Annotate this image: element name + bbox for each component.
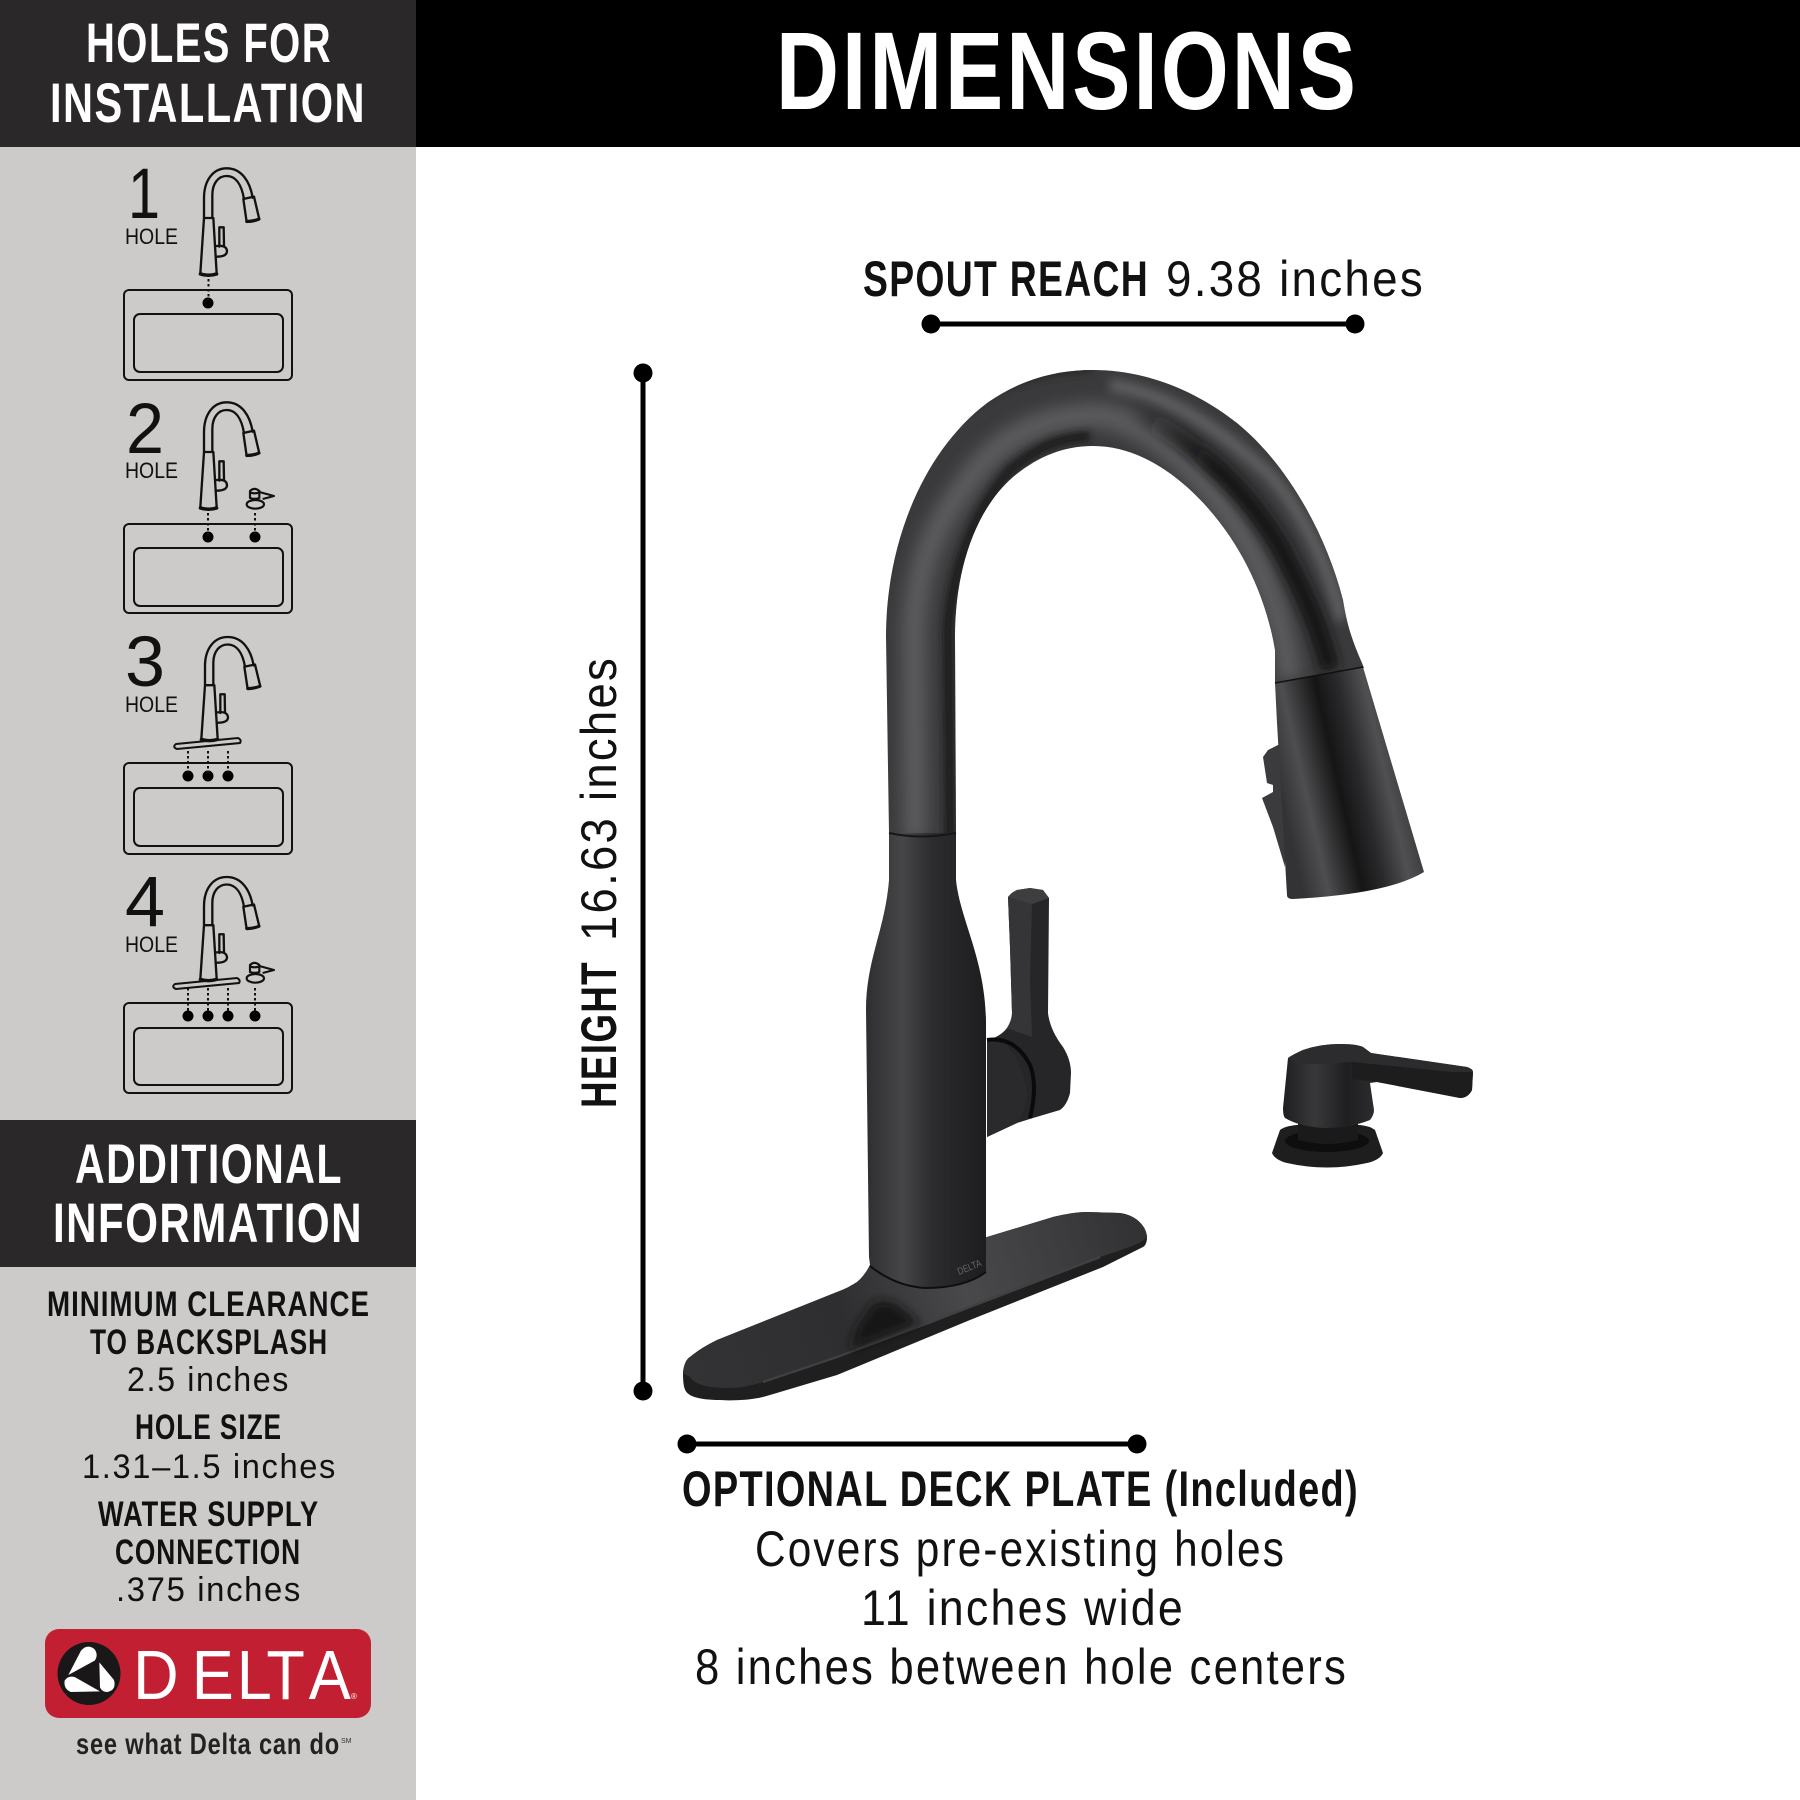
icon: 1 hole installation: 1 [128, 155, 160, 234]
heading: additional information: INFORMATION [53, 1191, 363, 1254]
text block: optional deck plate: Covers pre-existing holes [755, 1521, 1286, 1577]
text block: optional deck plate [682, 1461, 1359, 1695]
dimension: height [571, 364, 652, 1400]
icon: 2 hole installation: HOLE [125, 458, 178, 483]
logo: delta: ® [351, 1692, 357, 1701]
text block: optional deck plate: 11 inches wide [861, 1580, 1185, 1636]
heading: additional information: ADDITIONAL [75, 1132, 343, 1195]
icon: 3 hole installation [124, 623, 292, 854]
tagline: see what Delta can do [76, 1728, 340, 1761]
title: DIMENSIONS [776, 10, 1359, 133]
text block: minimum clearance: TO BACKSPLASH [90, 1323, 328, 1362]
icon: 2 hole installation [124, 390, 292, 613]
icon: 2 hole installation: 2 [126, 390, 164, 469]
text block: hole size: 1.31–1.5 inches [82, 1448, 337, 1486]
base ring [870, 1266, 986, 1288]
dimension line: deck plate width [678, 1434, 1146, 1454]
icon: 4 hole installation: HOLE [125, 932, 178, 957]
icon: 1 hole installation [124, 155, 292, 380]
text block: hole size [82, 1408, 337, 1486]
spout arch [870, 360, 1380, 840]
panel: left sidebar [0, 0, 416, 1800]
heading: holes for installation: INSTALLATION [50, 71, 366, 134]
icon: 4 hole installation: 4 [125, 863, 165, 942]
dimension: height: 16.63 inches [571, 656, 627, 941]
heading: holes for installation: HOLES FOR [86, 11, 332, 74]
heading: holes for installation [0, 0, 416, 147]
spray head [1262, 667, 1424, 899]
dimension: spout reach [863, 251, 1425, 334]
text block: water supply connection: WATER SUPPLY [98, 1495, 319, 1534]
text block: minimum clearance [47, 1285, 370, 1399]
deck plate [683, 1212, 1147, 1400]
dimension: spout reach: SPOUT REACH [863, 251, 1149, 307]
text block: minimum clearance: 2.5 inches [127, 1361, 290, 1399]
soap dispenser [1272, 1044, 1473, 1168]
faucet body [866, 830, 986, 1288]
text block: optional deck plate: OPTIONAL DECK PLATE (Included) [682, 1461, 1359, 1517]
text block: water supply connection: .375 inches [116, 1571, 302, 1609]
illustration: black kitchen faucet [683, 360, 1473, 1400]
heading: additional information [0, 1120, 416, 1267]
tagline: SM [341, 1738, 352, 1745]
icon: 3 hole installation: 3 [125, 623, 165, 702]
text block: hole size: HOLE SIZE [135, 1408, 282, 1447]
title bar: dimensions [416, 0, 1800, 147]
icon: 4 hole installation [124, 863, 292, 1093]
icon: 3 hole installation: HOLE [125, 692, 178, 717]
icon: 1 hole installation: HOLE [125, 224, 178, 249]
handle lever [987, 888, 1071, 1137]
spout seam [889, 833, 956, 836]
base logo: DELTA [956, 1258, 984, 1278]
text block: optional deck plate: 8 inches between hole centers [695, 1639, 1348, 1695]
logo: delta: DELTA [133, 1637, 351, 1715]
text block: water supply connection [98, 1495, 319, 1609]
text block: water supply connection: CONNECTION [115, 1533, 301, 1572]
dimension: spout reach: 9.38 inches [1166, 251, 1425, 307]
text block: minimum clearance: MINIMUM CLEARANCE [47, 1285, 370, 1324]
logo: delta [45, 1629, 371, 1718]
dimension: height: HEIGHT [571, 961, 627, 1108]
